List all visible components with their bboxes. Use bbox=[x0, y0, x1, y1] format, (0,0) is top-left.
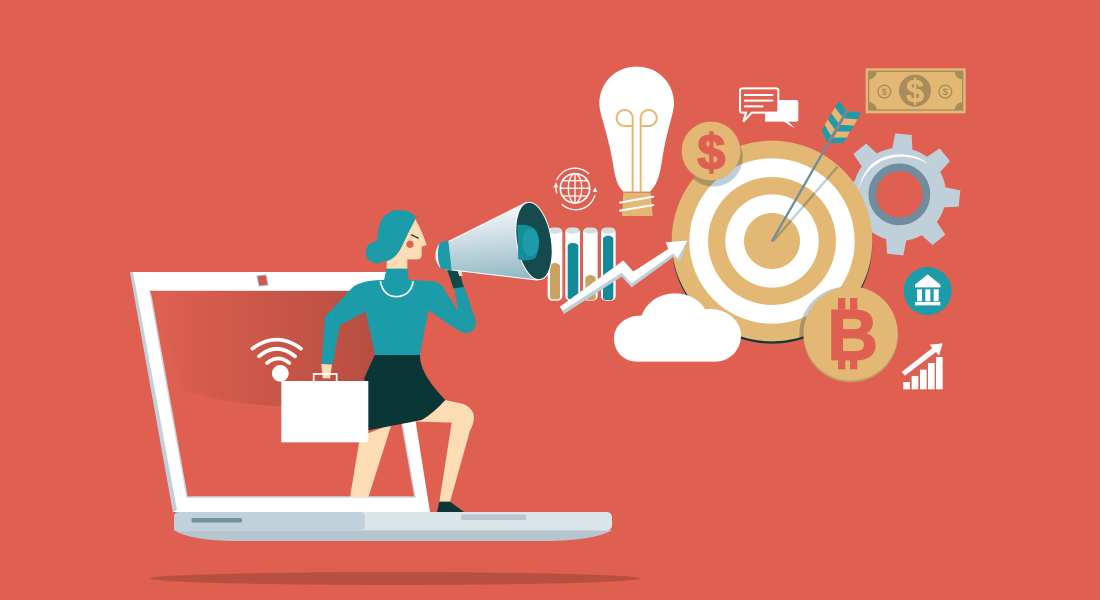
laptop camera bbox=[257, 275, 268, 286]
bank icon bbox=[904, 267, 952, 315]
bill centre coin: $ bbox=[906, 73, 924, 109]
megaphone handle bbox=[447, 269, 464, 288]
globe icon bbox=[553, 168, 597, 210]
dollar coin bbox=[682, 122, 740, 180]
sweater bbox=[321, 280, 476, 364]
bubble text lines bbox=[744, 95, 773, 106]
tube 4 bbox=[601, 228, 616, 301]
target shadow bbox=[672, 143, 872, 344]
megaphone cone bbox=[446, 203, 537, 280]
left feathers bbox=[822, 101, 846, 142]
megaphone inner bbox=[517, 225, 539, 260]
test tubes bbox=[548, 228, 616, 301]
target rings bbox=[672, 141, 872, 341]
tube 2 bbox=[565, 228, 580, 301]
wifi icon bbox=[252, 340, 301, 382]
illustration canvas bbox=[130, 66, 966, 585]
cloud bbox=[614, 293, 741, 362]
cheek bbox=[406, 241, 414, 248]
eye bbox=[411, 235, 419, 238]
target and coins bbox=[560, 110, 898, 382]
hand bbox=[321, 364, 332, 378]
woman figure bbox=[281, 210, 476, 512]
briefcase bbox=[281, 374, 368, 442]
bill corners bbox=[869, 71, 963, 110]
front bubble bbox=[740, 88, 778, 122]
growth chart icon bbox=[902, 343, 943, 389]
skirt bbox=[364, 355, 445, 430]
turtleneck bbox=[383, 268, 409, 283]
tube 3 bbox=[583, 228, 598, 301]
dart shaft bbox=[772, 110, 847, 242]
gear ring bbox=[872, 167, 926, 221]
right feathers bbox=[829, 111, 861, 143]
megaphone bell bbox=[511, 200, 557, 282]
gear highlight bbox=[858, 154, 928, 190]
dollar coin: $ bbox=[697, 124, 725, 180]
gear bbox=[838, 133, 960, 255]
hair bbox=[366, 210, 415, 263]
bill right coin: $ bbox=[943, 87, 949, 97]
necklace bbox=[380, 281, 413, 297]
bitcoin symbol: B bbox=[827, 296, 878, 376]
shadows on target bbox=[693, 146, 846, 338]
bulb base bbox=[620, 193, 653, 216]
laptop screen inner bbox=[150, 291, 415, 497]
laptop screen frame bbox=[130, 272, 430, 512]
laptop bbox=[130, 272, 612, 541]
dollar bill bbox=[866, 68, 966, 113]
head skin bbox=[387, 218, 427, 269]
back leg bbox=[350, 424, 392, 497]
laptop base bbox=[174, 512, 612, 541]
megaphone mouthpiece bbox=[436, 241, 452, 270]
ground shadow bbox=[150, 572, 640, 585]
dart fletching bbox=[822, 101, 861, 155]
shoe bbox=[437, 502, 464, 512]
filament bbox=[617, 110, 657, 192]
bill left coin: $ bbox=[882, 87, 888, 97]
light bulb bbox=[599, 67, 674, 216]
front leg bbox=[413, 400, 474, 502]
growth arrow bbox=[560, 241, 687, 314]
tube 1 bbox=[548, 228, 562, 301]
thumb bbox=[457, 270, 463, 276]
bitcoin coin bbox=[803, 286, 898, 382]
back bubble bbox=[765, 100, 798, 129]
speech bubbles icon bbox=[740, 88, 798, 129]
megaphone bbox=[435, 200, 557, 288]
